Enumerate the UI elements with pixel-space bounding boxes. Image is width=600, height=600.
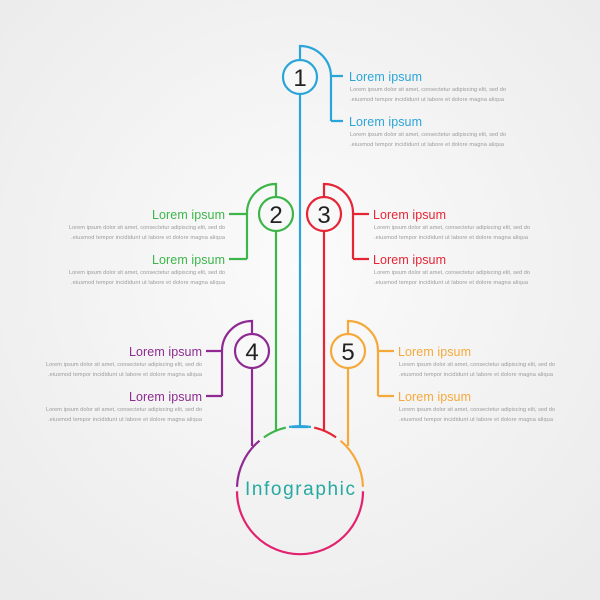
text block 4a: Lorem ipsum [129,345,202,359]
text block 4a: Lorem ipsum dolor sit amet, consectetur adipiscing elit, sed do [46,362,202,368]
text block 2a [69,208,226,241]
text block 2b: Lorem ipsum [152,253,225,267]
number 5: 5 [341,339,355,366]
text block 3b: Lorem ipsum [373,253,446,267]
text block 4a [46,345,203,378]
text block 3b [373,253,530,286]
text block 3b: .eiusmod tempor incididunt ut labore et dolore magna aliqua [374,280,529,286]
text block 2b: .eiusmod tempor incididunt ut labore et dolore magna aliqua [71,280,226,286]
text block 5b: Lorem ipsum [398,390,471,404]
text block 5a: .eiusmod tempor incididunt ut labore et dolore magna aliqua [399,372,554,378]
text block 2b [69,253,226,286]
text block 3b: Lorem ipsum dolor sit amet, consectetur adipiscing elit, sed do [374,270,530,276]
number 2: 2 [269,202,283,229]
text block 1b [349,115,506,148]
text block 1a: .eiusmod tempor incididunt ut labore et dolore magna aliqua [350,97,505,103]
text block 1a: Lorem ipsum dolor sit amet, consectetur adipiscing elit, sed do [350,87,506,93]
text block 4a: .eiusmod tempor incididunt ut labore et dolore magna aliqua [48,372,203,378]
text block 3a: Lorem ipsum dolor sit amet, consectetur adipiscing elit, sed do [374,225,530,231]
text block 5a: Lorem ipsum [398,345,471,359]
number 4: 4 [245,339,259,366]
central circle [237,426,363,554]
title: Infographic: Infographic [245,479,355,500]
text block 5b: .eiusmod tempor incididunt ut labore et dolore magna aliqua [399,417,554,423]
branch 3 (red) [307,184,369,431]
text block 1b: Lorem ipsum [349,115,422,129]
text block 2b: Lorem ipsum dolor sit amet, consectetur adipiscing elit, sed do [69,270,225,276]
branch 2 (green) [229,184,293,431]
text block 4b: Lorem ipsum [129,390,202,404]
text block 5b [398,390,555,423]
text block 2a: Lorem ipsum dolor sit amet, consectetur adipiscing elit, sed do [69,225,225,231]
branch 4 (purple) [206,321,269,446]
text block 4b: Lorem ipsum dolor sit amet, consectetur adipiscing elit, sed do [46,407,202,413]
text block 4b [46,390,203,423]
text block 4b: .eiusmod tempor incididunt ut labore et dolore magna aliqua [48,417,203,423]
text block 1b: Lorem ipsum dolor sit amet, consectetur adipiscing elit, sed do [350,132,506,138]
text block 5b: Lorem ipsum dolor sit amet, consectetur adipiscing elit, sed do [399,407,555,413]
branch 5 (orange) [331,321,394,446]
text block 3a: .eiusmod tempor incididunt ut labore et dolore magna aliqua [374,235,529,241]
text block 1b: .eiusmod tempor incididunt ut labore et dolore magna aliqua [350,142,505,148]
text block 5a: Lorem ipsum dolor sit amet, consectetur adipiscing elit, sed do [399,362,555,368]
text block 2a: Lorem ipsum [152,208,225,222]
text block 5a [398,345,555,378]
number 3: 3 [317,202,331,229]
number 1: 1 [293,65,307,92]
text block 2a: .eiusmod tempor incididunt ut labore et dolore magna aliqua [71,235,226,241]
branch 1 (blue) [283,46,343,427]
text block 1a: Lorem ipsum [349,70,422,84]
text block 1a [349,70,506,103]
circle 1 [283,60,317,94]
text block 3a [373,208,530,241]
text block 3a: Lorem ipsum [373,208,446,222]
